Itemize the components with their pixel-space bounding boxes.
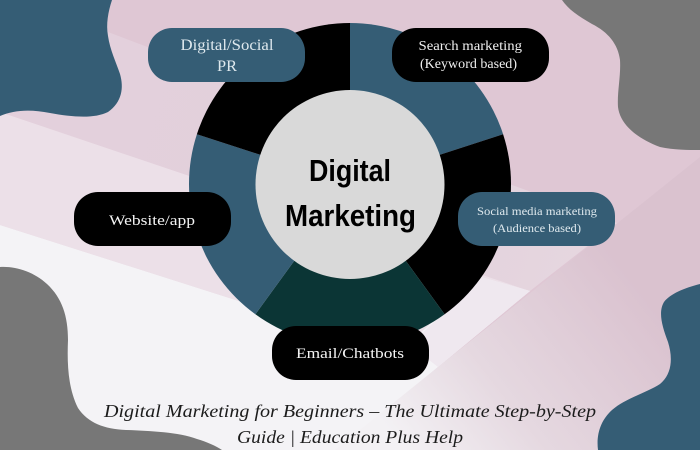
center circle bbox=[256, 90, 444, 279]
pill: Social media marketing bbox=[458, 192, 615, 246]
center title: Marketing bbox=[285, 198, 416, 233]
segment: website/app bbox=[189, 134, 350, 314]
segment: email/chatbots bbox=[255, 184, 445, 345]
blob: bottom-right blue bbox=[598, 284, 700, 450]
pill: Search marketing bbox=[392, 28, 549, 82]
pill: Email/Chatbots: Email/Chatbots bbox=[296, 346, 404, 362]
pill: Website/app bbox=[74, 192, 231, 246]
center title bbox=[285, 153, 416, 233]
pill: Search marketing: Search marketing bbox=[418, 38, 522, 53]
caption: Guide | Education Plus Help bbox=[237, 427, 463, 447]
caption: Digital Marketing for Beginners – The Ultimate Step-by-Step bbox=[103, 401, 596, 421]
pill: Website/app: Website/app bbox=[109, 213, 195, 229]
segment: social media marketing bbox=[350, 134, 511, 314]
pill: Digital/Social PR bbox=[148, 28, 305, 82]
segment: search marketing bbox=[350, 23, 503, 184]
pill: Digital/Social PR: Digital/Social bbox=[180, 37, 274, 54]
center title: Digital bbox=[309, 153, 391, 188]
pill: Email/Chatbots bbox=[272, 326, 429, 380]
caption bbox=[103, 401, 596, 447]
blob: top-left blue bbox=[0, 0, 122, 117]
pill: Search marketing: (Keyword based) bbox=[420, 56, 517, 71]
pill: Social media marketing: (Audience based) bbox=[493, 221, 581, 235]
pill: Social media marketing: Social media marketing bbox=[477, 204, 597, 218]
blob: top-right gray bbox=[562, 0, 700, 150]
segment: digital/social PR bbox=[197, 23, 350, 184]
wheel bbox=[189, 23, 511, 345]
blob: bottom-left gray bbox=[0, 267, 222, 450]
pill: Digital/Social PR: PR bbox=[217, 58, 238, 75]
